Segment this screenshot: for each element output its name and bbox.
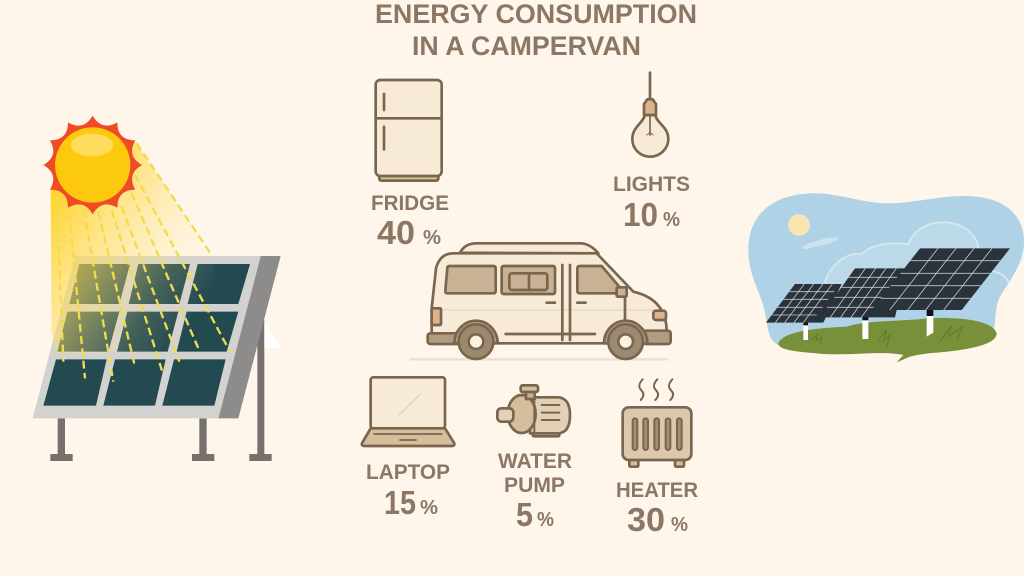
- sky blob: [748, 193, 1024, 347]
- panel side: [218, 256, 281, 418]
- van bumpers: [428, 333, 461, 344]
- ground shadow: [411, 356, 667, 363]
- icon: light bulb: [632, 73, 668, 157]
- van mirror: [617, 287, 627, 297]
- van: [428, 243, 671, 359]
- lower icons: [362, 377, 691, 467]
- large solar array: [872, 248, 1010, 310]
- icon: laptop: [362, 377, 454, 446]
- label: lights 10%: [613, 173, 690, 233]
- label: water pump 5%: WATER: [498, 450, 572, 473]
- title: IN A CAMPERVAN: [412, 31, 641, 61]
- upper icons and van: [376, 73, 671, 359]
- grass marks: [812, 325, 963, 347]
- icon: fridge: [376, 80, 442, 181]
- dashed rays: [57, 143, 230, 382]
- label: fridge 40%: [371, 192, 449, 251]
- label: heater 30%: [616, 479, 698, 538]
- label: fridge 40%: FRIDGE: [371, 192, 449, 215]
- label: heater 30%: 30: [627, 501, 665, 538]
- small solar array: [766, 284, 842, 323]
- label: lights 10%: 10: [623, 196, 658, 233]
- label: water pump 5%: 5: [516, 496, 533, 533]
- van body: [432, 253, 667, 343]
- van roof: [460, 243, 598, 253]
- clouds: [802, 222, 1009, 307]
- sunlight beam: [51, 142, 232, 353]
- illustration: solar panel with sun: [33, 116, 281, 461]
- label: fridge 40%: 40: [377, 214, 415, 251]
- label: water pump 5%: %: [537, 509, 554, 531]
- van windows: [445, 266, 625, 294]
- van doors and trim: [558, 265, 566, 340]
- panel legs: [50, 320, 272, 461]
- sun: [789, 215, 809, 235]
- label: laptop 15%: 15: [384, 484, 416, 521]
- label: laptop 15%: %: [420, 497, 438, 519]
- label: heater 30%: %: [671, 514, 688, 536]
- label: heater 30%: HEATER: [616, 479, 698, 502]
- icon: water pump: [497, 385, 570, 436]
- title: [375, 0, 697, 61]
- icon: heater: [623, 379, 691, 467]
- label: lights 10%: %: [663, 209, 680, 231]
- ground: [778, 318, 997, 362]
- label: fridge 40%: %: [423, 227, 441, 249]
- van lights: [432, 308, 441, 325]
- label: laptop 15%: LAPTOP: [366, 461, 450, 484]
- panel frame: [33, 256, 261, 418]
- support poles: [803, 310, 933, 340]
- label: water pump 5%: [498, 450, 572, 533]
- label: water pump 5%: PUMP: [504, 474, 565, 497]
- icon: sun: [43, 116, 142, 214]
- medium solar array: [820, 268, 907, 317]
- white support triangle: [264, 322, 281, 348]
- illustration: solar farm landscape: [748, 193, 1024, 362]
- wheel arches and wheels: [454, 321, 498, 343]
- label: laptop 15%: [366, 461, 450, 521]
- label: lights 10%: LIGHTS: [613, 173, 690, 196]
- solar cells: [43, 264, 250, 406]
